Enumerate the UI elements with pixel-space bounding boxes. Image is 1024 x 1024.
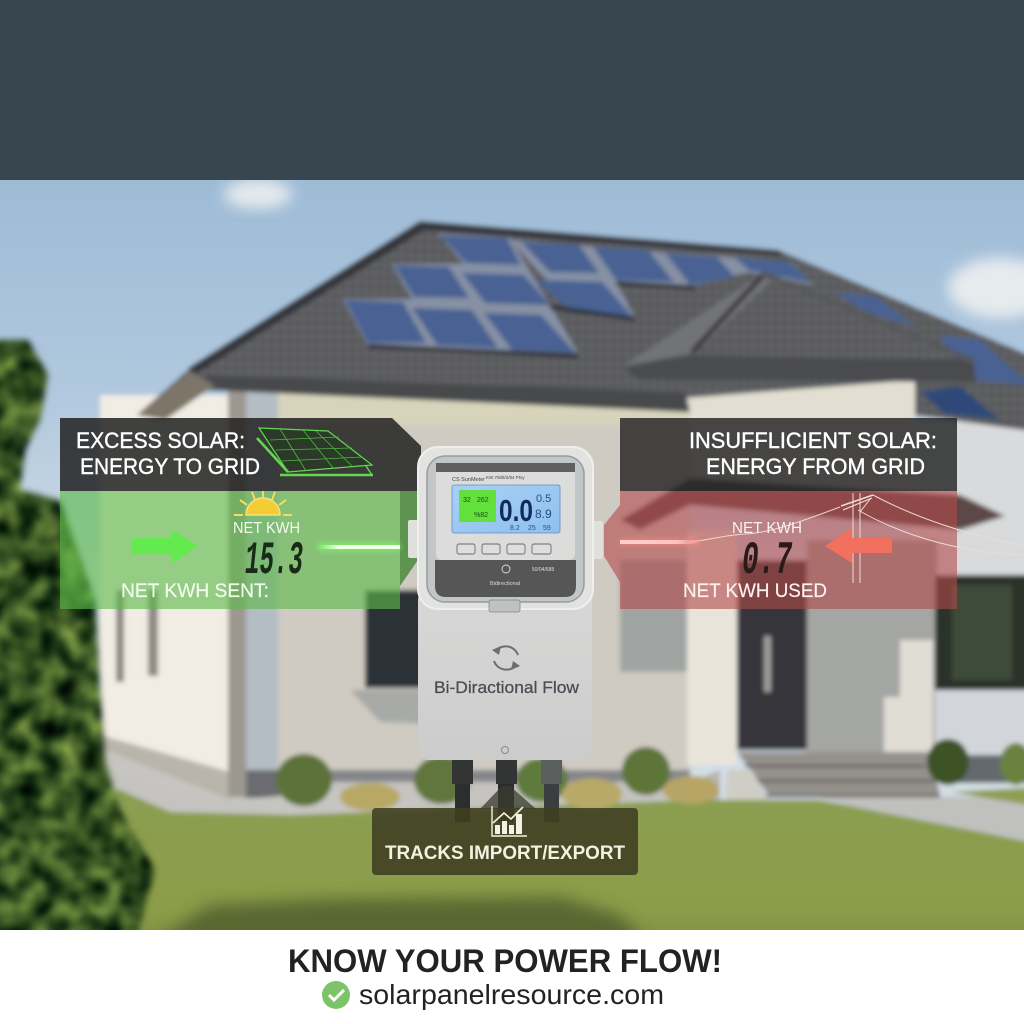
meter: bi-directional: KW 7/8/8/2/84 Ptxy (486, 475, 525, 480)
panel: excess solar (60, 418, 421, 609)
main roof (137, 221, 1024, 435)
panel: insufficient solar: ENERGY FROM GRID (706, 454, 925, 479)
value: 0.7: 0.7 (742, 535, 793, 587)
arrow: import (825, 528, 892, 563)
clear cover (418, 447, 593, 609)
label: net kwh used: NET KWH USED (683, 580, 827, 602)
heading: insufficient solar: INSUFFLICIENT SOLAR: (689, 428, 937, 453)
cables (452, 760, 562, 822)
heading: excess solar: EXCESS SOLAR: (76, 428, 245, 453)
header band (60, 418, 421, 491)
meter: bi-directional: %82 (474, 512, 488, 519)
shrubs (276, 754, 332, 806)
walkway and lawn (262, 793, 282, 800)
arrow: export (132, 530, 198, 563)
slogan: KNOW YOUR POWER FLOW! (288, 943, 722, 979)
label: net kwh: NET KWH (233, 520, 300, 537)
meter: bi-directional: 32 (463, 497, 471, 504)
value: 15.3: 15.3 (245, 535, 303, 587)
bottom band (435, 560, 576, 597)
bottom band marks: Bidirectional (490, 581, 520, 587)
dormer gable (956, 356, 962, 362)
porch roof (620, 478, 1005, 530)
left windows (116, 590, 124, 682)
icon: solar panel (257, 428, 373, 475)
meter label: Bi-Diractional Flow (434, 678, 580, 697)
lcd screen (452, 485, 560, 533)
screws (502, 746, 508, 754)
meter: bi-directional: 0.5 (536, 493, 551, 505)
solar panels (343, 233, 814, 353)
house walls (100, 395, 230, 772)
icon: flow cycle (492, 646, 520, 670)
panel: insufficient solar (604, 418, 1024, 609)
lcd main reading: 0.0 (499, 493, 533, 528)
beam: import (620, 539, 700, 545)
tree left (0, 340, 155, 945)
clouds (224, 179, 292, 209)
meter face (436, 463, 575, 560)
callout text: TRACKS IMPORT/EXPORT (385, 842, 625, 864)
panel: excess solar: ENERGY TO GRID (80, 454, 260, 479)
meter: bi-directional: 50/04/688 (532, 567, 554, 573)
header band (620, 418, 957, 491)
top banner (0, 0, 1024, 180)
meter: bi-directional: 59 (543, 525, 551, 532)
icon: sun (234, 491, 292, 515)
red body (620, 491, 957, 609)
meter: bi-directional: 8.9 (535, 507, 552, 521)
website: solarpanelresource.com (359, 979, 664, 1010)
brand text: CS SunMeter (452, 477, 485, 483)
icon: check (322, 981, 350, 1009)
beam: export (318, 543, 400, 551)
porch steps (737, 752, 940, 797)
bottom clip (489, 600, 520, 612)
lower box (418, 590, 592, 760)
meter: bi-directional: 262 (477, 497, 489, 504)
lawn shadow (160, 888, 644, 930)
label: net kwh: NET KWH (732, 520, 802, 537)
green body (60, 491, 400, 609)
background photo: house scene (0, 150, 1024, 960)
icon: chart (492, 806, 527, 836)
footer band (0, 930, 1024, 1024)
label: net kwh sent: NET KWH SENT: (121, 580, 269, 602)
icon: utility pole and wires (690, 493, 1024, 583)
buttons (457, 544, 551, 554)
lcd green block (459, 490, 496, 522)
side clips (408, 520, 422, 558)
meter: bi-directional: 25 (528, 525, 536, 532)
meter: bi-directional (408, 447, 603, 760)
callout: tracks import/export (372, 786, 638, 875)
meter: bi-directional: 8.2 (510, 525, 520, 532)
ground base behind house (106, 768, 673, 818)
